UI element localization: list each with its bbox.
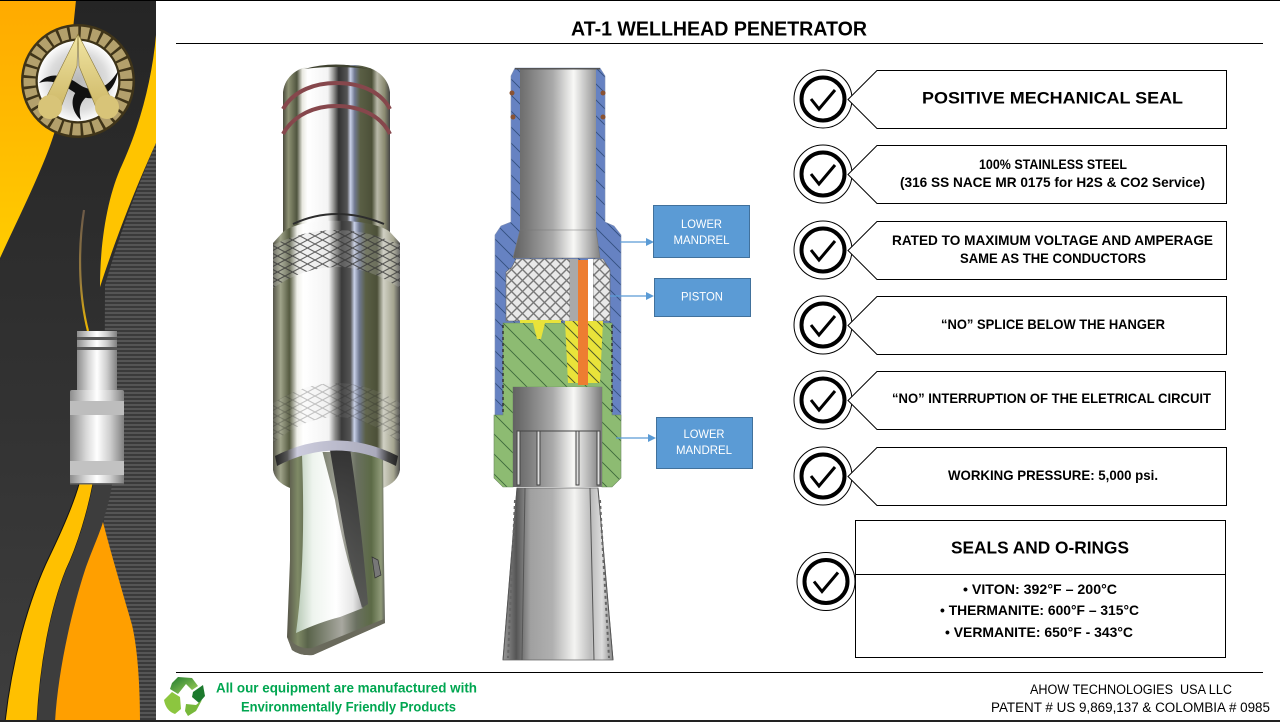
upper body [283, 65, 390, 240]
o-ring seals [510, 90, 606, 120]
feature: positive mechanical seal [794, 70, 1226, 128]
title: AT-1 WELLHEAD PENETRATOR [571, 18, 867, 40]
feature: no interruption: “NO” INTERRUPTION OF THE ELETRICAL CIRCUIT [892, 390, 1211, 406]
feature: rated voltage: RATED TO MAXIMUM VOLTAGE AND AMPERAGE [892, 232, 1213, 248]
icon: check [794, 221, 852, 279]
callout: lower mandrel top: LOWER [681, 219, 722, 231]
footer rule [176, 672, 1263, 673]
yellow lower ribbon [5, 484, 93, 722]
icon: recycle [164, 677, 205, 716]
icon: check [797, 552, 855, 610]
orange conductor [578, 260, 588, 385]
collar [273, 221, 400, 488]
feature: no splice [794, 296, 1226, 354]
lower bore [513, 387, 602, 487]
eco statement: All our equipment are manufactured with [216, 680, 477, 696]
orange drop [55, 522, 140, 722]
metal band [275, 440, 398, 466]
feature: stainless steel: (316 SS NACE MR 0175 for H2S & CO2 Service) [900, 174, 1205, 190]
inner bore [520, 68, 596, 231]
company and patent: PATENT # US 9,869,137 & COLOMBIA # 0985 [991, 700, 1270, 715]
feature: working pressure [794, 447, 1226, 506]
panel: seals and o-rings: • VITON: 392°F – 200°C [963, 581, 1117, 597]
feature: positive mechanical seal: POSITIVE MECHANICAL SEAL [922, 88, 1183, 108]
feature: no interruption [794, 371, 1226, 430]
piston crosshatch [506, 259, 570, 321]
callout: lower mandrel top: MANDREL [674, 235, 730, 247]
panel: seals and o-rings [797, 520, 1226, 658]
grey lower ribbon [37, 484, 112, 722]
icon: check [794, 371, 852, 429]
orange swoosh top [0, 0, 76, 258]
icon: check [794, 296, 852, 354]
eco statement [216, 680, 477, 714]
panel: seals and o-rings: • VERMANITE: 650°F - 343°C [945, 624, 1133, 640]
company and patent [991, 682, 1270, 715]
cable wire [80, 210, 88, 331]
feature: stainless steel [794, 145, 1226, 204]
lower cone [503, 488, 613, 660]
company and patent: AHOW TECHNOLOGIES USA LLC [1030, 682, 1232, 697]
icon: check [794, 447, 852, 505]
callout: piston [610, 278, 750, 316]
product render: penetrator exterior [273, 64, 400, 655]
panel: seals and o-rings: • THERMANITE: 600°F – 315°C [940, 602, 1139, 618]
striped grey background [103, 143, 156, 722]
eco statement: Environmentally Friendly Products [241, 700, 456, 714]
o-rings [283, 83, 390, 134]
yellow insert [565, 321, 603, 383]
feature: stainless steel: 100% STAINLESS STEEL [979, 156, 1127, 172]
callout: lower mandrel bottom: MANDREL [676, 445, 733, 457]
callout: lower mandrel bottom [616, 418, 752, 468]
outer blue housing [495, 68, 621, 420]
yellow streak [100, 35, 156, 287]
green lower body [494, 323, 621, 487]
panel: seals and o-rings: SEALS AND O-RINGS [951, 538, 1129, 558]
mini penetrator [70, 331, 124, 484]
thread lines [503, 325, 612, 415]
callout: lower mandrel top [620, 206, 750, 258]
header rule [176, 43, 1263, 44]
knurled band upper [273, 230, 400, 288]
callout: piston: PISTON [681, 292, 723, 304]
panel: decorative left sidebar [0, 0, 156, 722]
collet fingers [517, 431, 600, 485]
icon: check [794, 145, 852, 203]
company logo [21, 24, 135, 138]
centre channel [570, 259, 578, 321]
feature: rated voltage: SAME AS THE CONDUCTORS [960, 250, 1146, 266]
cone throat [513, 230, 600, 258]
feature: working pressure: WORKING PRESSURE: 5,000 psi. [948, 467, 1158, 483]
scooped tail [287, 452, 385, 655]
callout: lower mandrel bottom: LOWER [684, 429, 724, 441]
knurled band lower [273, 383, 400, 443]
icon: check [794, 70, 852, 128]
feature: no splice: “NO” SPLICE BELOW THE HANGER [941, 316, 1165, 332]
feature: rated voltage [794, 221, 1226, 280]
cross-section diagram [494, 68, 621, 660]
